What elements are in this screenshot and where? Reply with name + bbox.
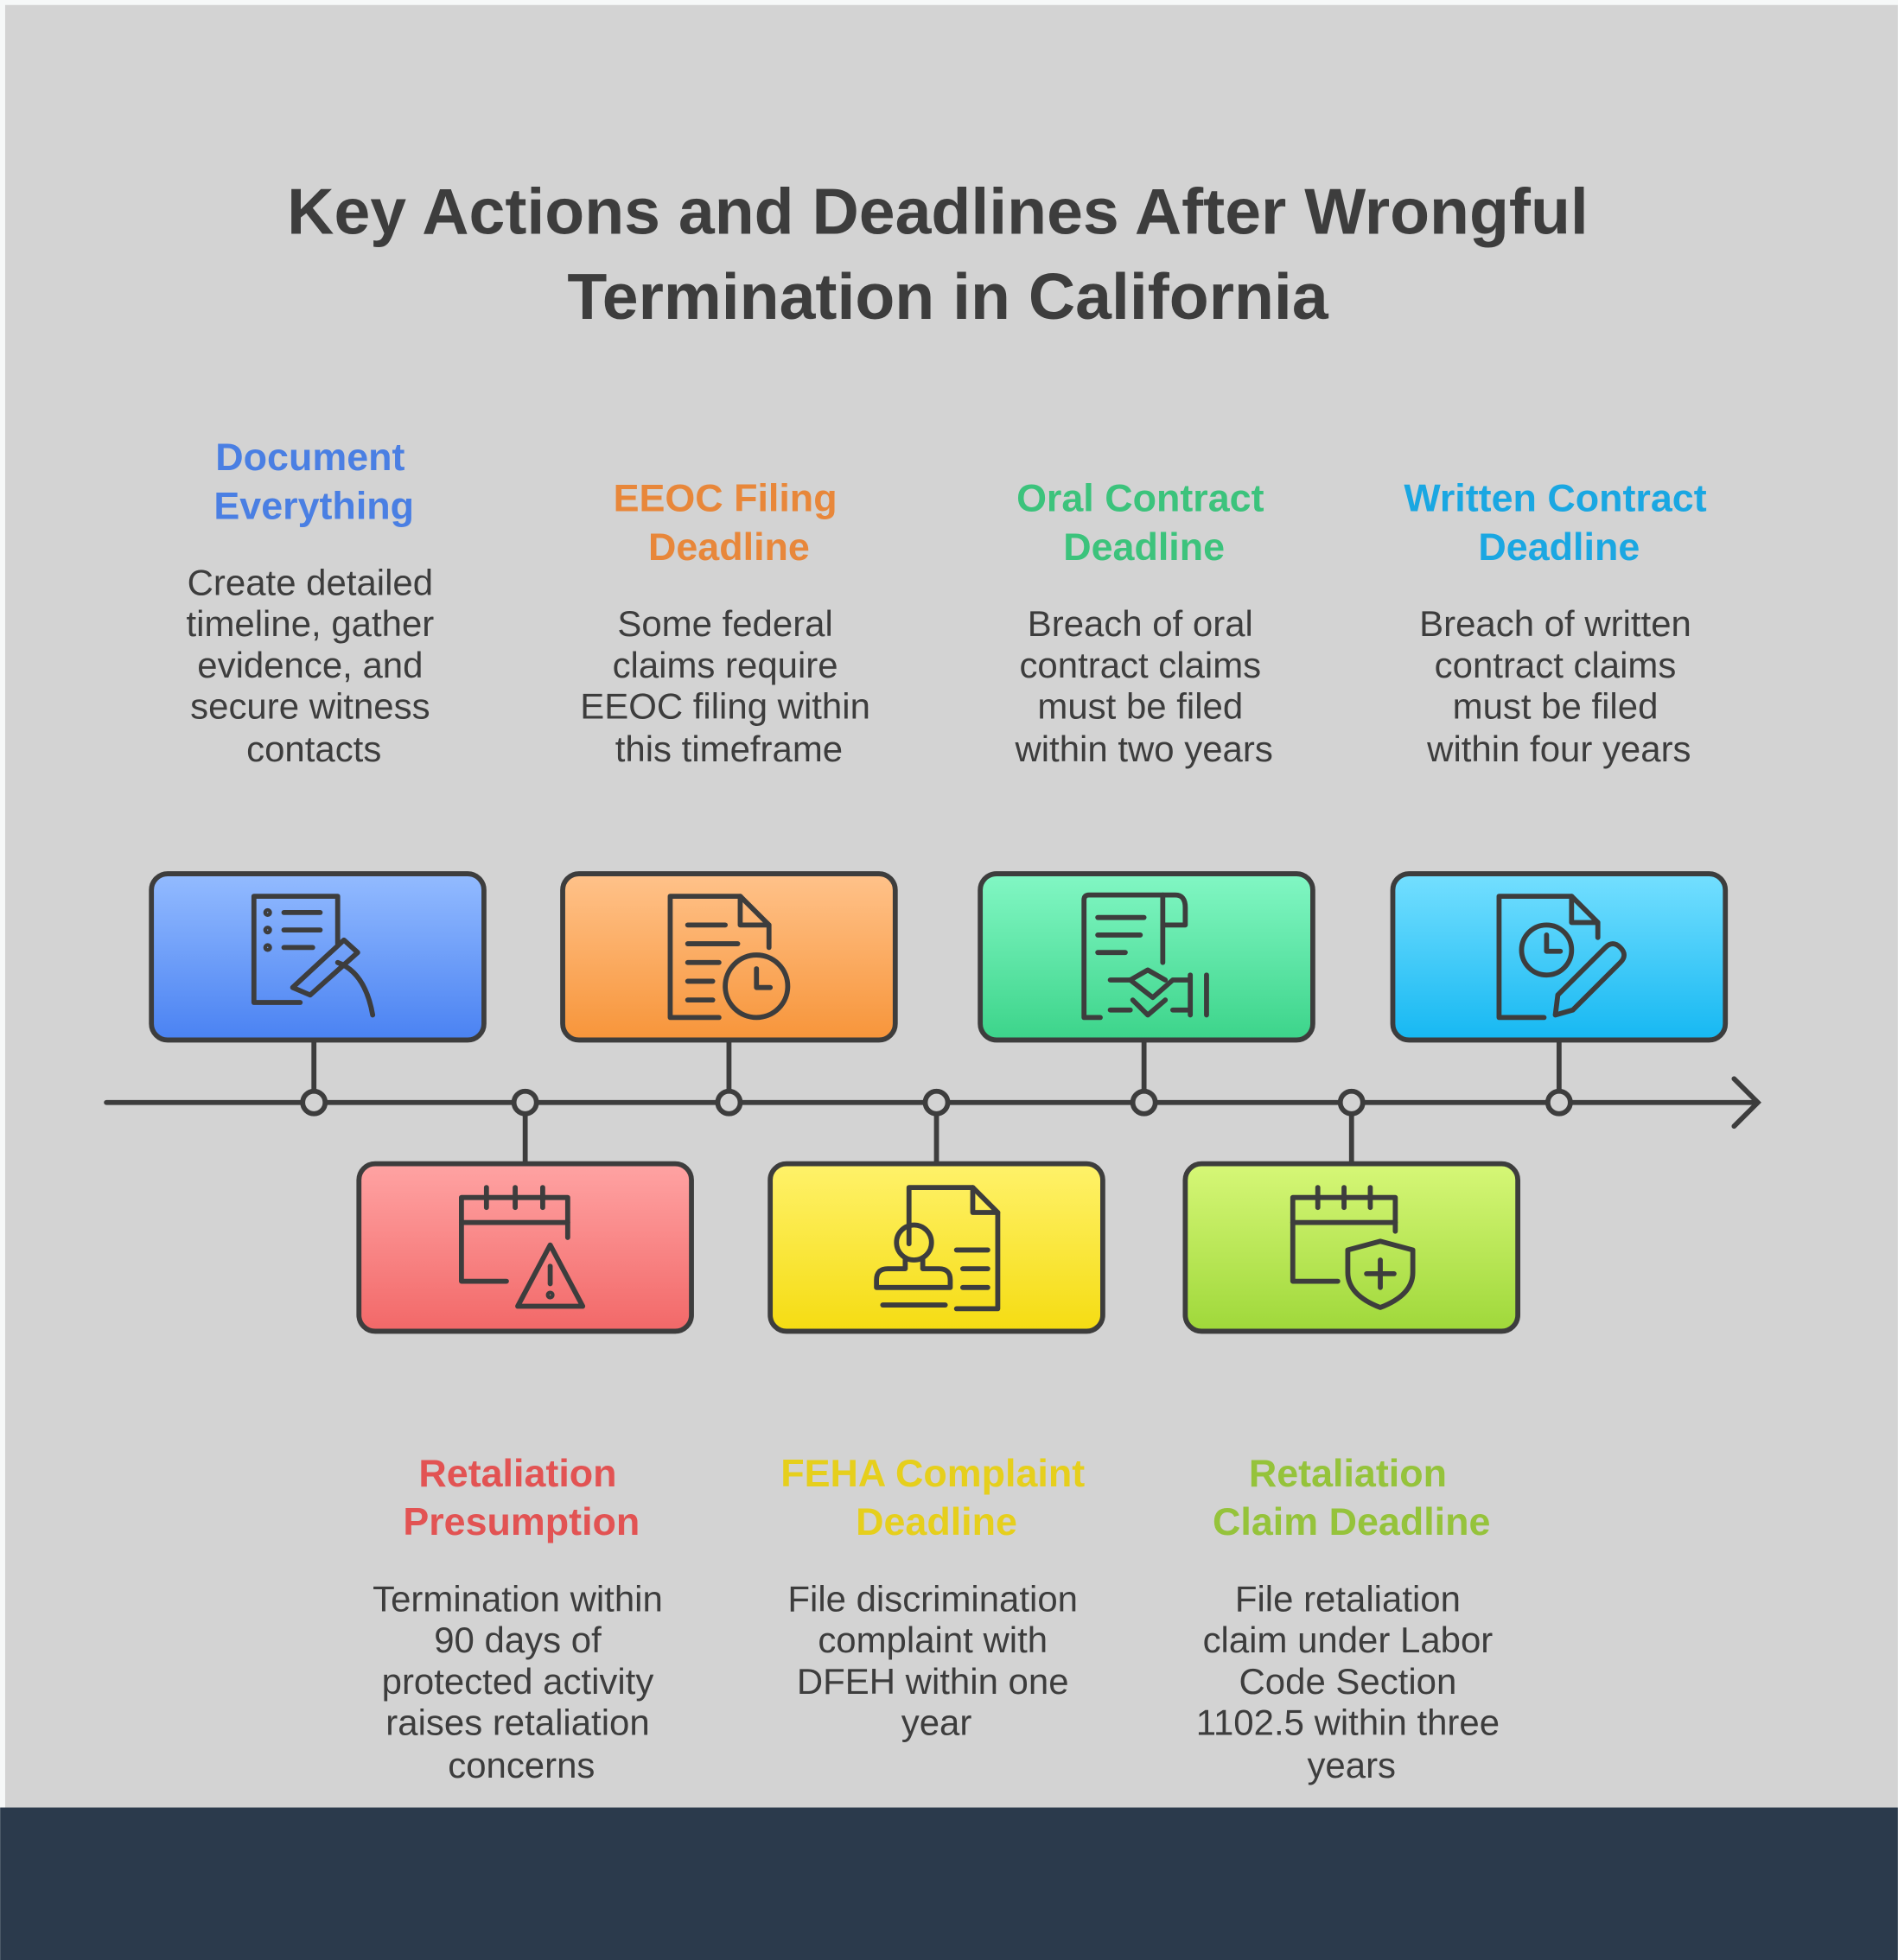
description: 1102.5 within three — [1196, 1702, 1500, 1743]
heading: Oral Contract — [1016, 476, 1264, 520]
heading: Deadline — [648, 525, 810, 569]
footer band — [0, 1808, 1898, 1960]
timeline — [106, 1040, 1758, 1164]
heading: Document — [215, 435, 405, 479]
title: Key Actions and Deadlines After Wrongful — [287, 175, 1589, 247]
description: complaint with — [818, 1620, 1048, 1660]
description: must be filed — [1453, 686, 1658, 727]
panel: retaliation presumption — [359, 1164, 691, 1785]
heading: Deadline — [1478, 525, 1640, 569]
panel: retaliation claim — [1185, 1164, 1518, 1785]
description: claim under Labor — [1203, 1620, 1493, 1660]
heading — [213, 435, 414, 527]
panel: oral contract — [980, 476, 1313, 1040]
description: Some federal — [617, 603, 833, 644]
heading: Deadline — [1063, 525, 1225, 569]
heading — [1404, 476, 1707, 569]
description: this timeframe — [615, 729, 843, 769]
icon: calendar with shield — [1293, 1187, 1413, 1308]
description: File discrimination — [787, 1578, 1078, 1619]
description: within two years — [1014, 729, 1273, 769]
description — [1419, 603, 1691, 769]
description: must be filed — [1037, 686, 1243, 727]
panel: eeoc filing — [563, 476, 895, 1040]
panel: written contract — [1392, 476, 1725, 1040]
description: contacts — [246, 729, 381, 769]
description: year — [901, 1702, 971, 1743]
description: evidence, and — [197, 645, 423, 685]
description — [1014, 603, 1273, 769]
description: DFEH within one — [797, 1661, 1069, 1702]
heading: Claim Deadline — [1213, 1499, 1490, 1543]
description: Breach of oral — [1028, 603, 1253, 644]
heading — [614, 476, 838, 569]
description: contract claims — [1435, 645, 1676, 685]
description: Breach of written — [1419, 603, 1691, 644]
heading: Presumption — [403, 1499, 640, 1543]
description: 90 days of — [434, 1620, 602, 1660]
icon: document with pen — [254, 896, 373, 1015]
description: within four years — [1426, 729, 1691, 769]
panel: document everything — [151, 435, 484, 1040]
icon: scroll with handshake — [1084, 895, 1207, 1017]
description: timeline, gather — [187, 603, 434, 644]
description — [787, 1578, 1078, 1743]
heading: Deadline — [856, 1499, 1017, 1543]
heading: Retaliation — [418, 1451, 617, 1495]
description: contract claims — [1019, 645, 1261, 685]
icon: document with clock — [670, 896, 787, 1017]
description: EEOC filing within — [580, 686, 870, 727]
description: years — [1307, 1745, 1396, 1785]
heading — [403, 1451, 640, 1543]
title: Termination in California — [567, 260, 1329, 333]
description: raises retaliation — [385, 1702, 650, 1743]
description — [1196, 1578, 1500, 1785]
description: Code Section — [1239, 1661, 1456, 1702]
heading: FEHA Complaint — [780, 1451, 1085, 1495]
description: secure witness — [190, 686, 430, 727]
description: Termination within — [373, 1578, 663, 1619]
icon: document with clock and pen — [1499, 896, 1624, 1017]
description: File retaliation — [1235, 1578, 1461, 1619]
heading — [780, 1451, 1085, 1543]
description — [187, 562, 434, 769]
description — [580, 603, 870, 769]
description — [373, 1578, 663, 1785]
icon: document with stamp — [876, 1187, 997, 1308]
description: claims require — [613, 645, 838, 685]
description: protected activity — [382, 1661, 653, 1702]
icon: calendar with warning — [462, 1187, 583, 1307]
title — [287, 175, 1589, 333]
panel: feha complaint — [770, 1164, 1103, 1743]
heading — [1016, 476, 1264, 569]
heading: EEOC Filing — [614, 476, 838, 520]
description: concerns — [448, 1745, 595, 1785]
heading: Retaliation — [1249, 1451, 1447, 1495]
heading: Everything — [213, 483, 414, 527]
heading — [1213, 1451, 1490, 1543]
heading: Written Contract — [1404, 476, 1707, 520]
description: Create detailed — [188, 562, 433, 602]
